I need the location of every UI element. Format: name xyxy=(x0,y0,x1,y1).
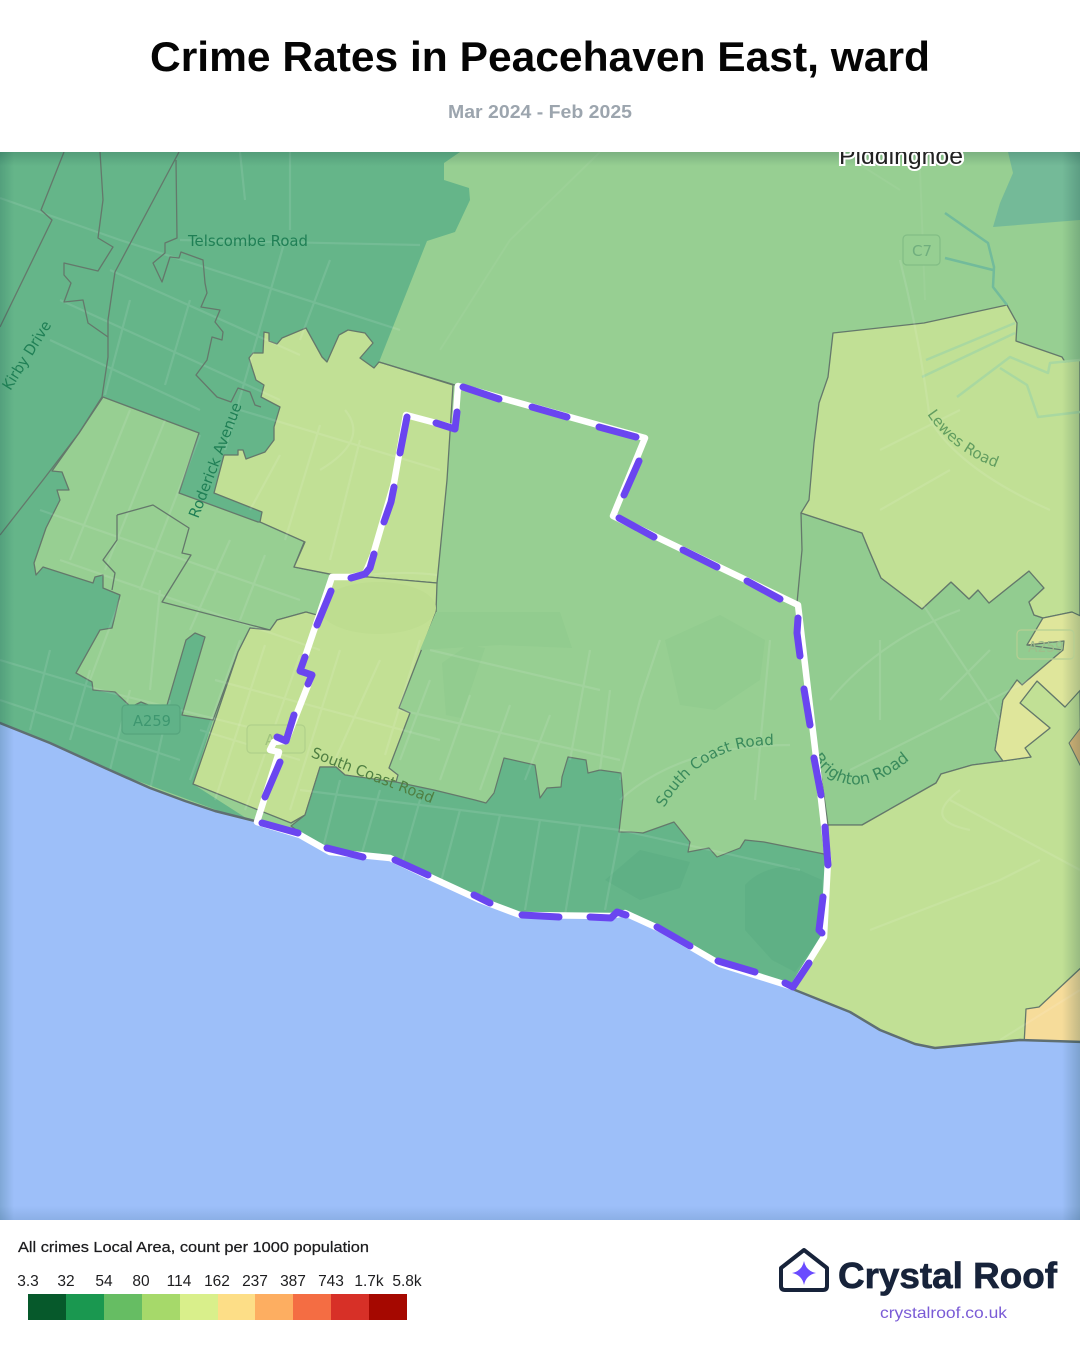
legend scale labels: 3.3 xyxy=(17,1273,39,1290)
legend scale labels: 1.7k xyxy=(354,1273,384,1290)
road labels xyxy=(2,234,1063,824)
area: ward woodland patches xyxy=(420,612,437,650)
road labels: Telscombe Road xyxy=(187,232,308,250)
road labels: South Coast Road xyxy=(309,744,437,807)
legend scale labels: 162 xyxy=(204,1273,230,1290)
road labels: A2 xyxy=(265,731,285,749)
sea xyxy=(0,721,1080,1230)
subtitle: date range: Mar 2024 - Feb 2025 xyxy=(448,102,632,122)
area: tan east edge xyxy=(1068,728,1080,766)
legend scale labels: 32 xyxy=(57,1273,75,1290)
area: reservoir xyxy=(993,152,1080,227)
area: west mid green xyxy=(34,397,334,720)
legend scale labels: 387 xyxy=(280,1273,306,1290)
road shields xyxy=(122,235,1074,753)
area: pale yellow xyxy=(995,612,1080,761)
road labels: A259 xyxy=(1028,638,1064,656)
legend scale labels: 54 xyxy=(95,1273,113,1290)
area: south-east yellow-green xyxy=(796,682,1080,1047)
area: south-west yellow-green xyxy=(193,577,437,823)
road labels: Roderick Avenue xyxy=(185,400,246,520)
water channels xyxy=(922,213,1080,417)
area: north yellow-green xyxy=(214,328,453,583)
road labels: South Coast Road xyxy=(656,734,772,807)
road labels: Kirby Drive xyxy=(0,318,55,393)
legend title: All crimes Local Area, count per 1000 population xyxy=(18,1239,369,1256)
legend scale labels: 743 xyxy=(318,1273,344,1290)
website url: crystalroof.co.uk xyxy=(880,1305,1008,1322)
legend scale labels: 80 xyxy=(132,1273,150,1290)
place label: Piddinghoe: Piddinghoe xyxy=(839,143,963,170)
legend xyxy=(17,1239,422,1320)
legend scale labels: 5.8k xyxy=(392,1273,422,1290)
road labels: C7 xyxy=(912,242,932,260)
land base: mid green areas xyxy=(133,152,1080,856)
title: Crime Rates in Peacehaven East, ward xyxy=(150,33,930,80)
road labels: A259 xyxy=(133,712,171,730)
area: coastal ward dark green xyxy=(291,757,828,987)
legend colour bar xyxy=(28,1294,407,1320)
legend scale labels xyxy=(17,1273,422,1290)
area: coastal darker patches xyxy=(605,850,822,972)
ward boundary: Peacehaven East xyxy=(257,386,828,987)
road network xyxy=(0,152,1080,1040)
logo: Crystal Roof xyxy=(781,1250,1058,1322)
edge vignette xyxy=(0,152,1080,1220)
area: north-west dark green xyxy=(0,152,470,825)
wordmark: Crystal Roof xyxy=(838,1255,1058,1296)
icon: house with star xyxy=(781,1250,827,1290)
area: playing field tint xyxy=(434,605,436,614)
legend scale labels: 237 xyxy=(242,1273,268,1290)
road labels: Brighton Road xyxy=(819,751,908,785)
area: tan south-east xyxy=(1024,968,1080,1041)
road labels: Lewes Road xyxy=(928,409,999,467)
area: east mid green xyxy=(797,513,1063,825)
faint countryside tracks xyxy=(440,152,925,350)
area: north-east yellow-green xyxy=(801,305,1080,618)
internal boundary lines xyxy=(0,152,455,630)
legend scale labels: 114 xyxy=(167,1273,192,1290)
